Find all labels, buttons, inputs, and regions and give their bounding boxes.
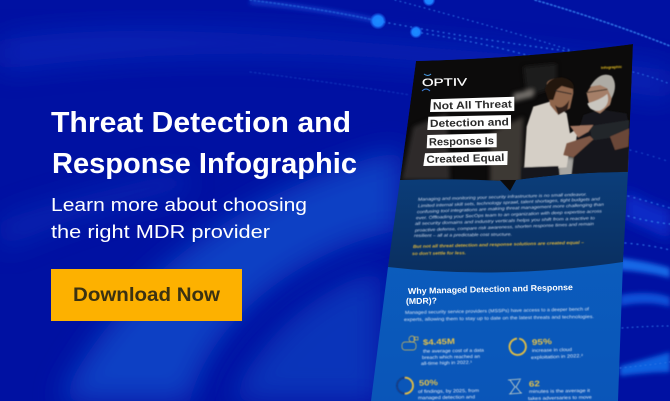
intro paragraph	[414, 192, 605, 238]
document photo header	[400, 44, 633, 182]
document title strips: Not All Threat	[433, 98, 513, 112]
infographic document preview	[360, 40, 640, 401]
headline	[51, 107, 357, 180]
icon: ring chart 50%	[397, 378, 413, 394]
intro paragraph: proactive defense, compare risk awareness, shorten response times and remain	[414, 221, 595, 233]
stat: 95%: 95%	[532, 337, 552, 347]
icon: ring chart 95%	[508, 337, 527, 356]
icon: hourglass	[508, 379, 522, 394]
document navy arrow notch	[500, 180, 516, 191]
intro paragraph: resilient – all at a predictable cost structure.	[414, 232, 512, 238]
section heading: Why MDR: Why Managed Detection and Response	[408, 282, 573, 296]
headline: Threat Detection and	[51, 107, 351, 139]
intro paragraph: confusing tool integrations are making threat management more challenging than	[417, 202, 605, 214]
label: Infographic: Infographic	[601, 65, 622, 70]
glowing node dots	[370, 0, 436, 38]
subheading: Learn more about choosing	[51, 194, 307, 215]
stat: $4.45M: the average cost of a data	[423, 348, 485, 354]
subheading	[51, 194, 307, 242]
optiv logo: OPTIV	[422, 77, 467, 89]
subheading: the right MDR provider	[51, 221, 270, 242]
stat: 50%	[397, 378, 479, 400]
stat: $4.45M: breach which reached an	[422, 354, 480, 360]
intro paragraph: all security domains and industry verticals helps you shift from a reactive to	[415, 215, 596, 226]
document navy intro panel	[388, 160, 630, 272]
section intro text	[404, 306, 594, 322]
stat: 62: 62	[529, 379, 541, 389]
stat: 62: minutes is the average it	[529, 388, 591, 394]
intro paragraph: Limited internal skill sets, technology sprawl, talent shortages, tight budgets and	[418, 196, 601, 208]
button: Download Now	[51, 269, 242, 321]
background: dotted light lines	[250, 0, 670, 368]
photo: man in white shirt	[521, 77, 580, 180]
stat: 50%: managed detection and	[418, 394, 476, 400]
stat: 95%: increase in cloud	[532, 347, 573, 353]
stat: 62	[508, 379, 593, 401]
stat: 62: takes adversaries to move	[528, 395, 593, 401]
stat: 50%: 50%	[419, 378, 438, 388]
yellow callout: But not all threat detection and response solutions are created equal –	[413, 240, 585, 249]
document title strips: Response Is	[429, 135, 494, 148]
document title strips: Detection and	[430, 116, 509, 130]
button: Download Now: Download Now	[73, 285, 220, 306]
intro paragraph: Managing and monitoring your security infrastructure is no small endeavor.	[418, 192, 587, 202]
stat: $4.45M: $4.45M	[423, 337, 455, 347]
section intro text: experts, allowing them to stay up to date on the latest threats and technologies.	[404, 314, 594, 322]
stat: $4.45M	[402, 336, 485, 366]
headline: Response Infographic	[52, 148, 357, 180]
section heading: Why MDR: (MDR)?	[406, 295, 437, 306]
yellow callout	[412, 240, 585, 256]
stat: $4.45M: all-time high in 2022.¹	[421, 360, 473, 366]
yellow callout: so don't settle for less.	[412, 250, 466, 256]
document title strips: Created Equal	[426, 152, 505, 166]
section heading: Why MDR	[406, 285, 573, 306]
document title strips	[423, 97, 514, 166]
icon: people and cloud	[402, 336, 418, 350]
photo: older man in black shirt	[563, 75, 630, 175]
intro paragraph: ever. Offloading your SecOps team to an organization with deep expertise across	[416, 208, 603, 220]
stat: 95%: exploitation in 2022.²	[531, 353, 584, 360]
document lower blue section	[371, 250, 624, 401]
stat: 50%: of findings, by 2025, from	[418, 388, 479, 394]
stat: 95%	[508, 337, 584, 360]
section intro text: Managed security service providers (MSSPs) have access to a deeper bench of	[405, 306, 590, 315]
optiv logo	[422, 74, 467, 91]
photo: server room background	[402, 63, 629, 183]
